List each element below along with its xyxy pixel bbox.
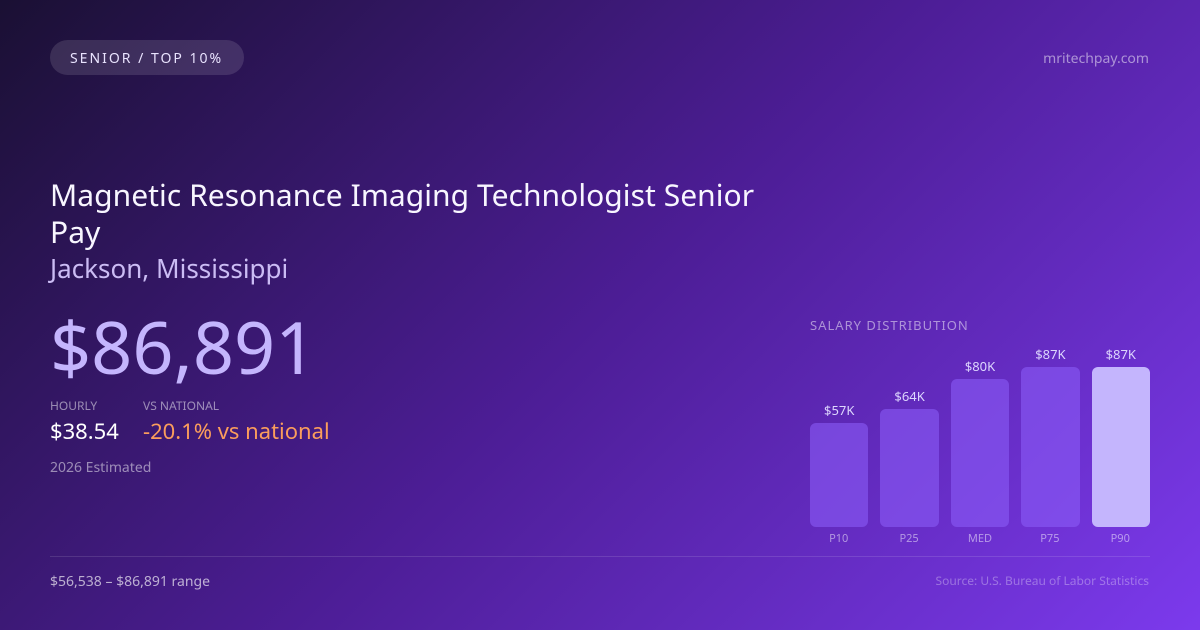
bar: MED <box>951 357 1009 527</box>
bar: P10 <box>810 401 868 527</box>
badge: senior / top 10%: SENIOR / TOP 10% <box>70 49 223 68</box>
bar: P25: $64K <box>894 387 925 405</box>
location subtitle: Jackson, Mississippi <box>50 250 288 286</box>
badge: senior / top 10% <box>50 40 244 75</box>
bar: P10: $57K <box>824 401 854 419</box>
label: P10: P10 <box>829 531 848 546</box>
site domain: mritechpay.com <box>1043 49 1149 68</box>
label: P90: P90 <box>1111 531 1130 546</box>
label: P25: P25 <box>899 531 919 546</box>
vs national label: VS NATIONAL <box>143 397 219 414</box>
bar: P75: $87K <box>1035 345 1066 363</box>
hourly value: $38.54 <box>50 416 119 446</box>
bar: P90 highlighted: $87K <box>1106 345 1136 363</box>
label: MED: MED <box>968 531 992 546</box>
title: Magnetic Resonance Imaging Technologist Senior Pay <box>50 174 754 252</box>
bar: P90 highlighted <box>1092 345 1150 527</box>
stat: vs national <box>143 397 330 446</box>
main salary figure: $86,891 <box>50 298 316 396</box>
year note: 2026 Estimated <box>50 458 151 477</box>
vs national value: -20.1% vs national <box>143 416 330 446</box>
bar: MED: $80K <box>965 357 995 375</box>
bar: P25 <box>880 387 939 527</box>
hourly label: HOURLY <box>50 397 97 414</box>
stat: hourly <box>50 397 119 446</box>
salary range: $56,538 – $86,891 range <box>50 572 210 591</box>
source: Source: U.S. Bureau of Labor Statistics <box>936 572 1149 589</box>
label: P75: P75 <box>1040 531 1060 546</box>
chart heading: SALARY DISTRIBUTION <box>810 316 969 334</box>
bar: P75 <box>1021 345 1080 527</box>
